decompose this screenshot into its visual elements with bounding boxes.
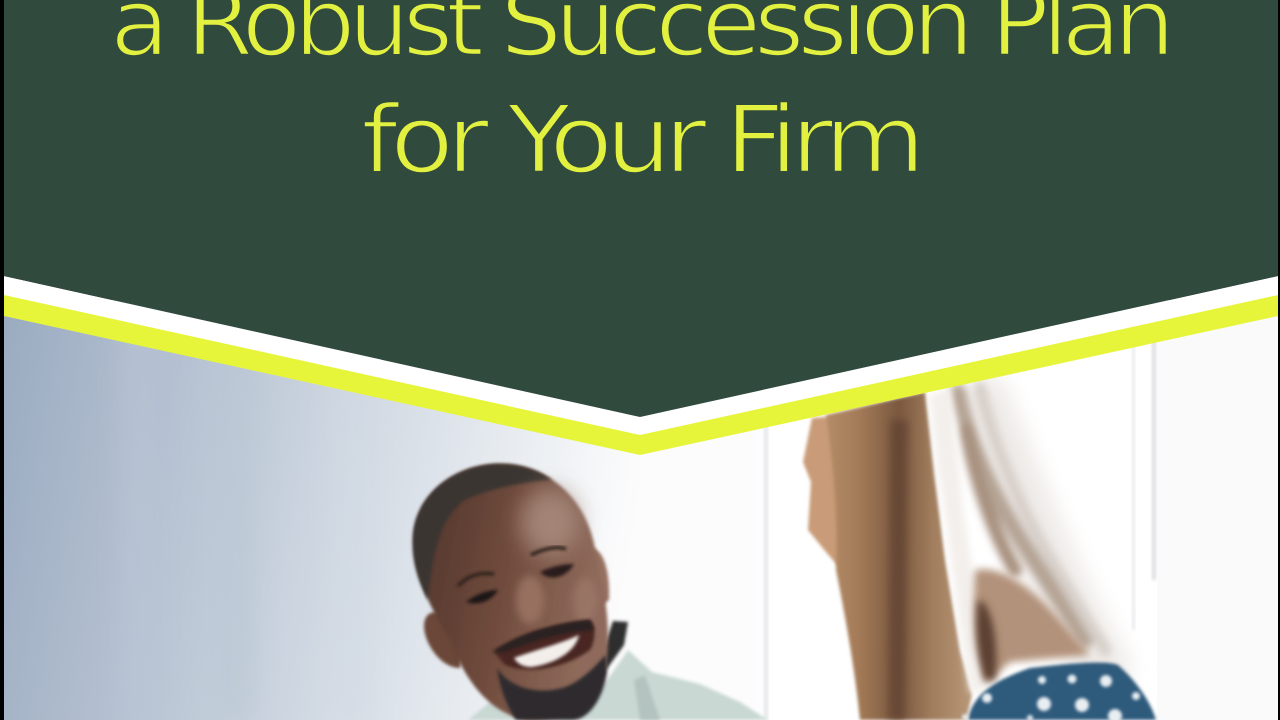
forehead highlight xyxy=(520,488,580,556)
cheek and nose highlights xyxy=(516,576,544,624)
blouse xyxy=(968,663,1156,720)
main hair xyxy=(826,392,972,720)
head xyxy=(414,464,608,720)
left ear xyxy=(424,612,466,668)
hair xyxy=(413,464,552,600)
dark green header panel xyxy=(4,0,1278,417)
photo background xyxy=(4,300,1278,720)
dark hair shadow xyxy=(888,420,908,720)
collar xyxy=(603,621,628,670)
teeth xyxy=(514,635,579,667)
yellow chevron band xyxy=(4,295,1278,455)
shirt xyxy=(468,650,768,720)
back hair xyxy=(974,569,1090,685)
photo: woman seen from behind xyxy=(803,375,1156,720)
white chevron band xyxy=(4,276,1278,436)
mouth and moustache xyxy=(494,620,594,670)
title: for Your Firm xyxy=(361,86,918,195)
beard xyxy=(497,655,607,720)
face xyxy=(803,415,860,580)
blouse dots xyxy=(962,674,1140,720)
right ear xyxy=(592,548,609,610)
light hair streak xyxy=(930,388,985,692)
title xyxy=(110,0,1168,195)
faded hair strands xyxy=(955,375,1130,695)
brows and eyes xyxy=(458,573,494,586)
photo: smiling man xyxy=(413,464,768,720)
